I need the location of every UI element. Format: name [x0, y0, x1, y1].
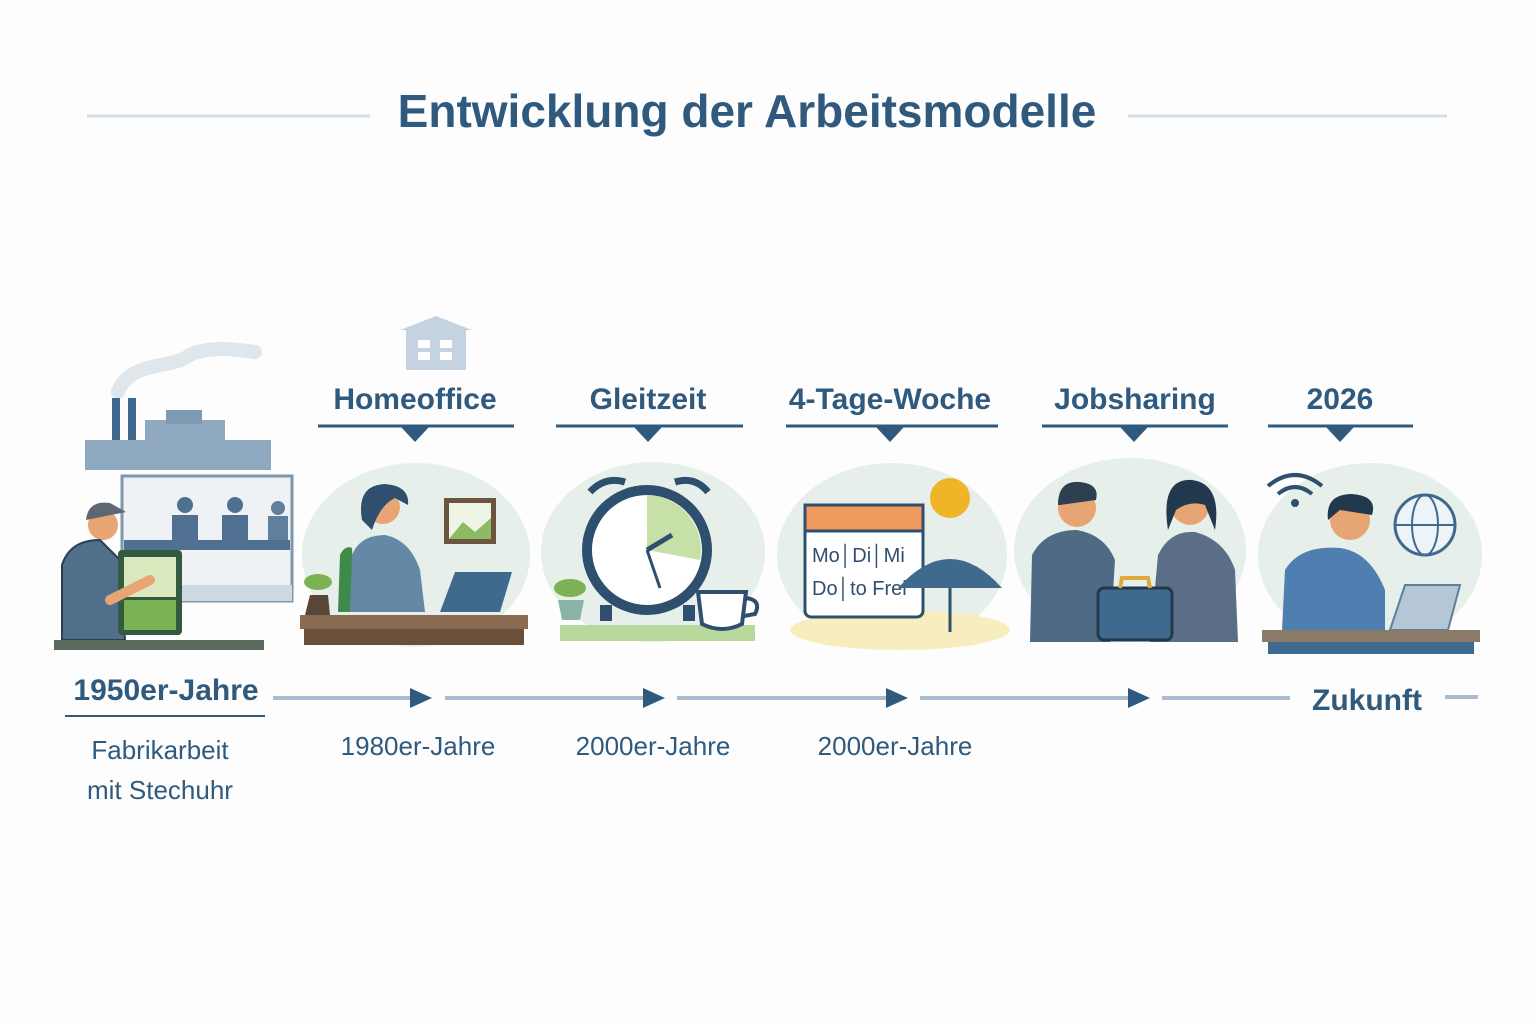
heading: Jobsharing: Jobsharing [1054, 383, 1216, 416]
year labels: 1980er-Jahre [341, 731, 495, 761]
text: Fabrikarbeit mit Stechuhr [87, 735, 233, 805]
heading: Gleitzeit: Gleitzeit [590, 383, 706, 416]
year labels [341, 731, 972, 761]
heading: Jobsharing [1042, 383, 1228, 442]
timeline arrows [273, 688, 1478, 708]
heading: 4-Tage-Woche [786, 383, 998, 442]
heading: 2026 [1268, 383, 1413, 442]
panel: 4-Tage-Woche calendar: Mo│Di│Mi [812, 543, 905, 569]
panel: 2026 remote [1258, 463, 1482, 654]
text: Fabrikarbeit mit Stechuhr: Fabrikarbeit [91, 735, 229, 765]
heading: Homeoffice: Homeoffice [333, 383, 497, 416]
panel: Jobsharing [1014, 458, 1246, 642]
panel: homeoffice illustration [300, 463, 530, 647]
title: Entwicklung der Arbeitsmodelle [398, 85, 1096, 137]
heading: Gleitzeit [556, 383, 743, 442]
year labels: 2000er-Jahre [818, 731, 972, 761]
text: Fabrikarbeit mit Stechuhr: mit Stechuhr [87, 775, 233, 805]
heading: 4-Tage-Woche: 4-Tage-Woche [789, 383, 991, 416]
heading: Homeoffice [318, 316, 514, 442]
label: Zukunft: Zukunft [1312, 684, 1422, 717]
year labels: 2000er-Jahre [576, 731, 730, 761]
label: 1950er-Jahre: 1950er-Jahre [73, 674, 259, 707]
panel: Gleitzeit clock [541, 462, 765, 642]
panel: 4-Tage-Woche calendar [777, 463, 1010, 650]
panel: 4-Tage-Woche calendar: Do│to Frei [812, 576, 907, 602]
panel: factory 1950s [54, 349, 292, 650]
heading: 2026: 2026 [1307, 383, 1373, 416]
